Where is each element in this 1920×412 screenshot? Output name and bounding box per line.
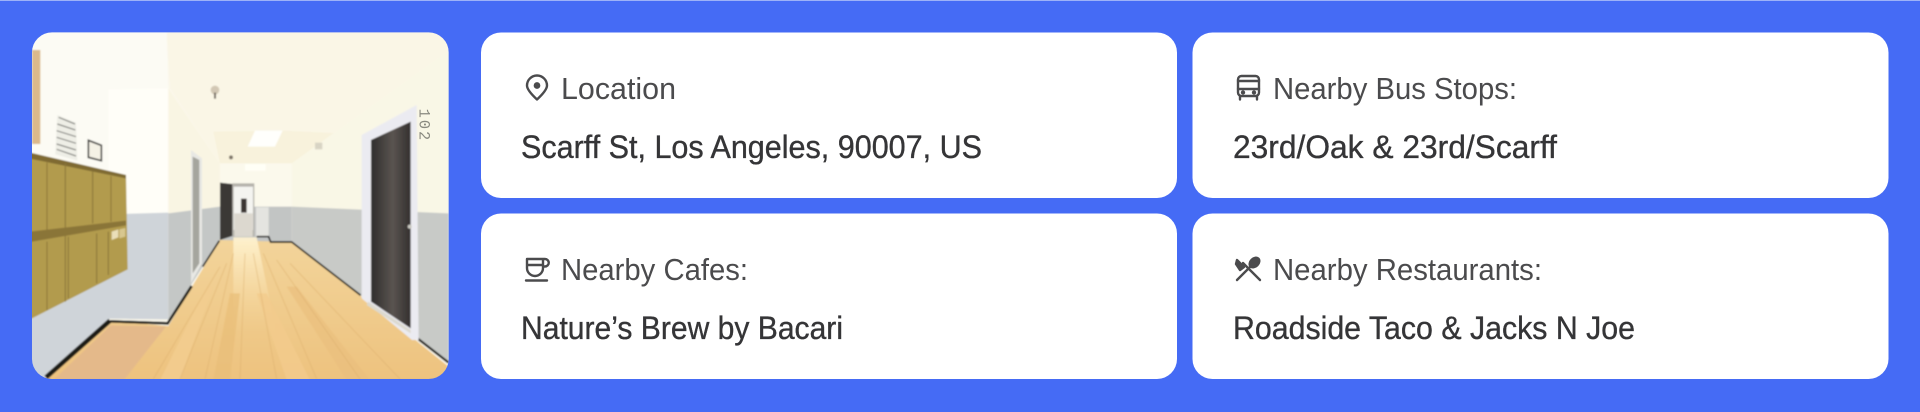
- label: location: Location: [561, 71, 676, 106]
- icon: coffee cup: [526, 259, 549, 280]
- icon: bus: [1238, 76, 1259, 100]
- label: nearby restaurants: Nearby Restaurants:: [1273, 252, 1542, 287]
- value: cafes: Nature’s Brew by Bacari: [521, 310, 843, 346]
- photo: apartment hallway: [30, 30, 450, 380]
- value: address: Scarff St, Los Angeles, 90007, US: [521, 129, 982, 165]
- value: bus stops: 23rd/Oak & 23rd/Scarff: [1233, 129, 1557, 165]
- card: nearby bus stops: [1192, 32, 1888, 198]
- label: nearby cafes: Nearby Cafes:: [561, 252, 748, 287]
- icon: crossed fork and spoon: [1236, 256, 1261, 280]
- door number 102: 102: [415, 109, 433, 142]
- card: nearby restaurants: [1192, 214, 1888, 379]
- value: restaurants: Roadside Taco & Jacks N Joe: [1233, 310, 1635, 346]
- card: nearby cafes: [481, 214, 1177, 379]
- icon: map pin: [527, 76, 547, 100]
- label: nearby bus stops: Nearby Bus Stops:: [1273, 71, 1517, 106]
- card: location: [481, 32, 1177, 198]
